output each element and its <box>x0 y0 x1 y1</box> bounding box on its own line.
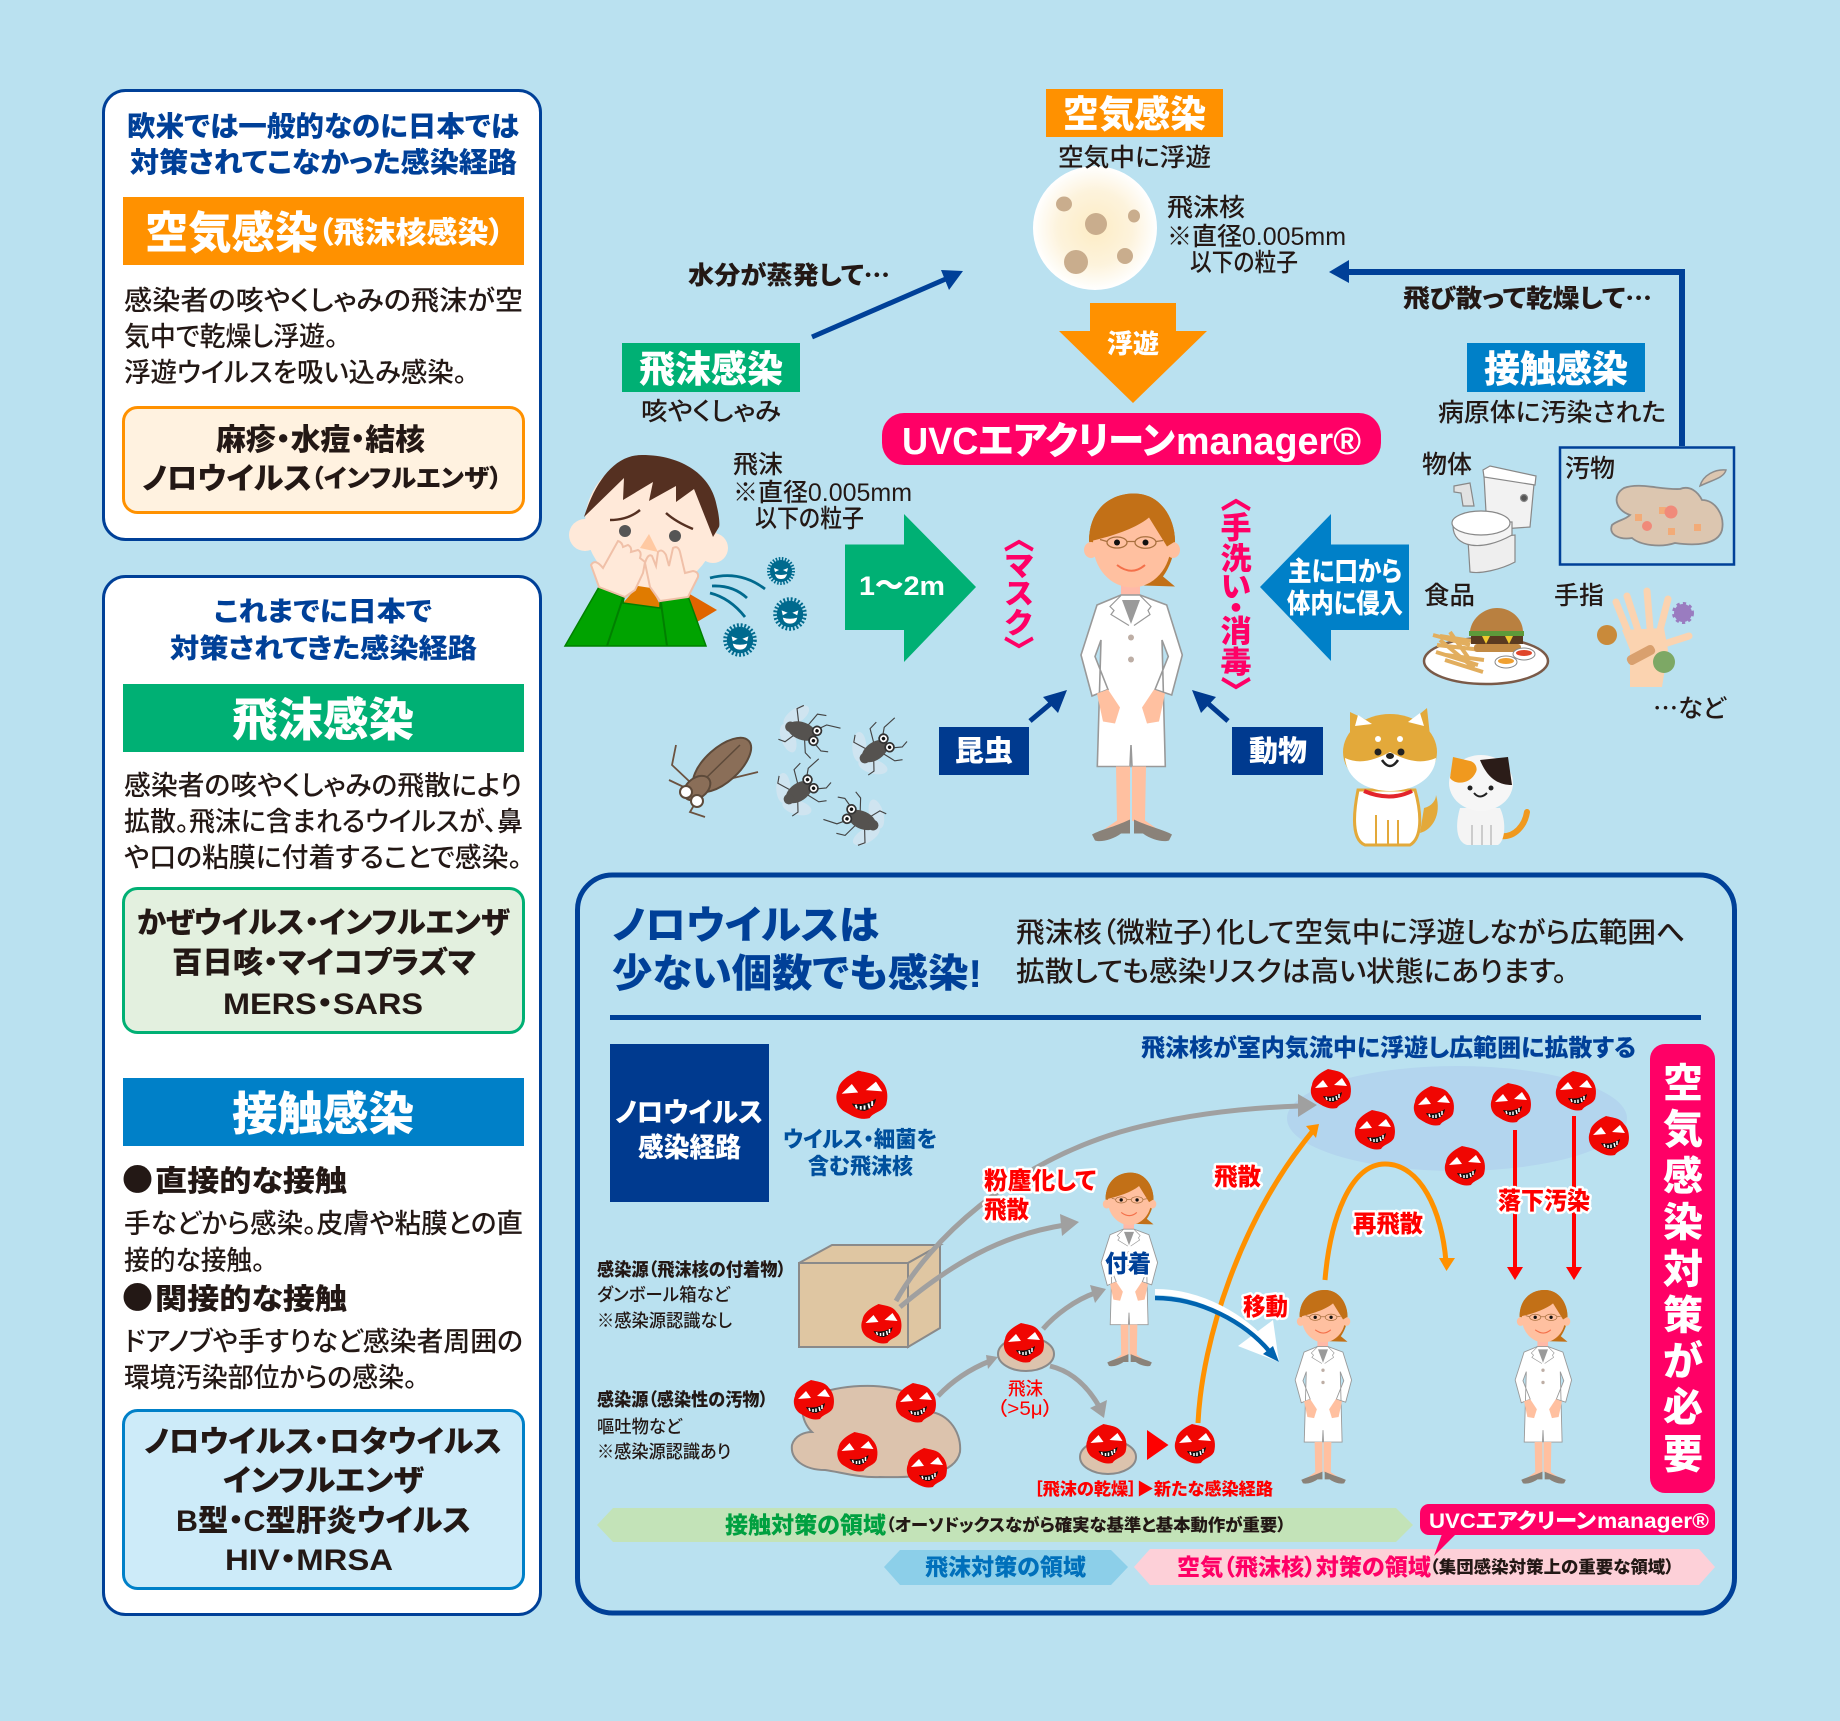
text: source attached: ※感染源認識なし <box>597 1311 732 1331</box>
text: source attached <box>597 1259 786 1331</box>
text: droplet size <box>997 1379 1053 1420</box>
text: contaminated by pathogens: 病原体に汚染された <box>1438 399 1666 427</box>
text: mask: 〈マスク〉 <box>998 537 1034 651</box>
banner: airborne infection: 空気感染 <box>145 209 318 258</box>
callout: UVC air clean manager: manager® <box>1597 1510 1710 1533</box>
box: filth: 汚物 <box>1565 455 1615 483</box>
panel: airborne measures needed: 空気感染対策が必要 <box>1663 1062 1703 1477</box>
illustration: cockroach <box>669 728 760 817</box>
text: airborne description: 気中で乾燥し浮遊。 <box>124 322 338 352</box>
text: droplet description: 感染者の咳やくしゃみの飛散により <box>124 771 522 801</box>
heading: airborne route intro: 欧米では一般的なのに日本では <box>127 111 519 142</box>
heading: conventional routes intro <box>170 597 477 664</box>
nurse: middle <box>1295 1290 1352 1484</box>
illustration: flies <box>762 695 920 857</box>
text: indirect contact <box>122 1273 523 1393</box>
icon: toilet <box>1452 466 1536 573</box>
arrow: move <box>1155 1292 1279 1362</box>
text: object: 物体 <box>1422 451 1472 479</box>
heading: norovirus low dose <box>612 905 982 996</box>
heading: conventional routes intro: 対策されてきた感染経路 <box>170 633 477 664</box>
banner: droplet infection: 飛沫感染 <box>232 694 414 746</box>
heading: airborne route intro: 対策されてこなかった感染経路 <box>130 146 517 178</box>
text: droplet size note <box>733 451 912 533</box>
band: airborne measures <box>1134 1549 1715 1585</box>
text: airborne description: 感染者の咳やくしゃみの飛沫が空 <box>124 286 523 316</box>
text: direct contact <box>122 1155 523 1276</box>
disease box: droplet: MERS・SARS <box>223 988 423 1021</box>
text: source attached: ダンボール箱など <box>597 1285 731 1305</box>
arrow: 1 to 2 metres: 1〜2m <box>859 571 945 601</box>
banner: droplet infection <box>123 684 524 752</box>
illustration: shiba dog <box>1343 708 1438 845</box>
text: direct contact: ● <box>122 1155 153 1200</box>
text: cough and sneeze: 咳やくしゃみ <box>641 398 781 426</box>
disease box: airborne: ノロウイルス <box>142 463 312 496</box>
text: indirect contact: ● <box>122 1273 153 1318</box>
text: airborne description: 浮遊ウイルスを吸い込み感染。 <box>124 358 467 388</box>
band: airborne measures: 空気（飛沫核）対策の領域 <box>1177 1554 1431 1580</box>
band: airborne measures: （集団感染対策上の重要な領域） <box>1430 1557 1674 1577</box>
text: food: 食品 <box>1424 582 1475 610</box>
text: source filth: 嘔吐物など <box>597 1417 683 1437</box>
text: direct contact: 手などから感染。皮膚や粘膜との直 <box>124 1209 523 1239</box>
text: indirect contact: ドアノブや手すりなど感染者周囲の <box>124 1327 523 1357</box>
disease box: contact: HIV・MRSA <box>225 1544 393 1577</box>
disease box: droplet: かぜウイルス・インフルエンザ <box>137 907 510 940</box>
text: attached: 付着 <box>1105 1251 1151 1278</box>
banner: contact infection <box>123 1078 524 1146</box>
arrows: orange respread <box>1198 1124 1455 1423</box>
legend: virus droplet nucleus: ウイルス・細菌を <box>783 1127 937 1152</box>
disease box: airborne: 麻疹・水痘・結核 <box>216 424 425 457</box>
disease box: contact: B型・C型肝炎ウイルス <box>176 1505 471 1538</box>
icon: aerosol oval <box>1287 1066 1627 1171</box>
label: contact infection: 接触感染 <box>1484 349 1628 390</box>
disease box: contact <box>124 1410 524 1588</box>
disease box: droplet: 百日咳・マイコプラズマ <box>172 946 476 980</box>
nurse: contact <box>1101 1173 1158 1366</box>
text: hand washing and disinfection: 〈手洗い・消毒〉 <box>1216 496 1251 692</box>
text: evaporating water: 水分が蒸発して … <box>688 256 890 292</box>
text: source attached: 感染源（飛沫核の付着物） <box>597 1259 786 1280</box>
arrow: into the body: 体内に侵入 <box>1287 589 1403 619</box>
arrows: grey spread paths <box>896 1094 1317 1418</box>
text: norovirus description <box>1016 917 1685 987</box>
band: droplet measures <box>884 1550 1128 1585</box>
disease box: contact: ノロウイルス・ロタウイルス <box>144 1426 502 1459</box>
text: spread: 飛散 <box>1214 1164 1261 1191</box>
heading: spread in room air: 飛沫核が室内気流中に浮遊し広範囲に拡散する <box>1141 1034 1636 1062</box>
banner: UVC air clean manager: UVCエアクリーン <box>902 421 1176 463</box>
text: source filth <box>597 1389 768 1462</box>
label: insects: 昆虫 <box>955 735 1013 768</box>
text: norovirus description: 拡散しても感染リスクは高い状態にあります。 <box>1016 956 1567 987</box>
arrow: animals to nurse <box>1192 690 1228 721</box>
heading: conventional routes intro: これまでに日本で <box>214 597 432 627</box>
banner: UVC air clean manager <box>882 413 1381 465</box>
illustration: cardboard box <box>799 1245 940 1347</box>
band: contact measures <box>597 1508 1413 1542</box>
text: source filth: ※感染源認識あり <box>597 1442 731 1462</box>
illustration: nurse <box>1081 494 1182 841</box>
text: re-scatter: 再飛散 <box>1353 1211 1423 1238</box>
text: norovirus description: 飛沫核（微粒子）化して空気中に浮遊しながら広範囲へ <box>1016 917 1685 948</box>
text: droplet size note: 以下の粒子 <box>755 505 864 533</box>
arrow: floating down: 浮遊 <box>1107 329 1159 359</box>
arrows: falling contamination <box>1507 1116 1582 1280</box>
label: insects <box>939 727 1029 775</box>
label: animals: 動物 <box>1249 735 1307 768</box>
illustration: contaminated objects <box>1422 448 1734 725</box>
text: floating in air: 空気中に浮遊 <box>1058 144 1211 172</box>
text: indirect contact: 関接的な接触 <box>155 1283 347 1316</box>
text: dust scatter <box>984 1168 1096 1224</box>
box: norovirus route title: ノロウイルス <box>615 1098 763 1128</box>
text: etc: …など <box>1653 689 1728 725</box>
label: airborne infection: 空気感染 <box>1063 94 1206 135</box>
text: droplet nucleus note <box>1167 194 1346 277</box>
text: fingers: 手指 <box>1554 582 1604 610</box>
nurse: right <box>1515 1290 1572 1484</box>
panel: droplet and contact infection summary <box>104 576 540 1614</box>
plates: droplets <box>998 1337 1136 1474</box>
label: droplet infection <box>622 343 800 392</box>
text: dust scatter: 粉塵化して <box>984 1168 1096 1195</box>
text: droplet description <box>124 771 523 873</box>
disease box: contact: インフルエンザ <box>223 1465 424 1498</box>
text: droplet size note: 飛沫 <box>733 451 783 479</box>
disease box: airborne <box>124 408 524 512</box>
arrow: 1 to 2 metres <box>845 514 976 662</box>
arrow: red triangle <box>1147 1430 1168 1460</box>
callout: UVC air clean manager: UVCエアクリーン <box>1429 1510 1596 1533</box>
panel: norovirus routes <box>578 875 1734 1613</box>
disease box: airborne: （インフルエンザ） <box>311 465 502 493</box>
icon: droplet nucleus <box>1033 166 1157 290</box>
panel: airborne infection summary <box>104 90 540 540</box>
banner: airborne infection <box>123 197 524 265</box>
illustration: coughing boy <box>565 455 804 654</box>
arrow: contact to nucleus <box>1329 260 1682 446</box>
box: filth <box>1560 448 1734 564</box>
text: dust scatter: 飛散 <box>984 1197 1029 1224</box>
illustration: vomit <box>792 1386 960 1477</box>
arrow: floating down <box>1059 303 1207 403</box>
viruses <box>794 1069 1629 1488</box>
band: droplet measures: 飛沫対策の領域 <box>925 1554 1086 1580</box>
heading: norovirus low dose: ノロウイルスは <box>612 905 880 948</box>
text: droplet nucleus note: 以下の粒子 <box>1190 249 1298 277</box>
illustration: calico cat <box>1449 755 1527 845</box>
banner: UVC air clean manager: manager® <box>1176 421 1361 463</box>
text: droplet description: 拡散。飛沫に含まれるウイルスが、鼻 <box>124 807 523 837</box>
arrow: into the body: 主に口から <box>1288 557 1402 587</box>
text: droplet size note: ※直径0.005mm <box>733 479 912 507</box>
heading: airborne route intro <box>127 111 519 178</box>
band: contact measures: （オーソドックスながら確実な基準と基本動作が重要） <box>886 1515 1286 1535</box>
text: move: 移動 <box>1243 1294 1288 1321</box>
label: droplet infection: 飛沫感染 <box>639 349 783 390</box>
label: animals <box>1232 727 1323 775</box>
band: contact measures: 接触対策の領域 <box>725 1512 886 1538</box>
arrow: insects to nurse <box>1030 690 1067 721</box>
banner: contact infection: 接触感染 <box>232 1088 414 1140</box>
text: airborne description <box>124 286 523 388</box>
diagram: infection routes <box>565 89 1734 857</box>
label: contact infection <box>1467 343 1645 392</box>
box: norovirus route title: 感染経路 <box>638 1132 741 1163</box>
icon: burger plate <box>1424 608 1548 684</box>
legend: virus droplet nucleus: 含む飛沫核 <box>808 1154 913 1179</box>
text: droplet size: 飛沫 <box>1008 1379 1043 1399</box>
text: droplet nucleus note: ※直径0.005mm <box>1167 223 1346 251</box>
arrow: droplet to nucleus <box>812 270 963 337</box>
text: indirect contact: 環境汚染部位からの感染。 <box>124 1363 417 1393</box>
legend: virus droplet nucleus <box>783 1071 937 1179</box>
heading: norovirus low dose: 少ない個数でも感染! <box>612 953 982 996</box>
text: falling contamination: 落下汚染 <box>1498 1188 1590 1215</box>
text: droplet size: （>5μ） <box>997 1398 1053 1420</box>
text: drying new route: ［飛沫の乾燥］▶新たな感染経路 <box>1034 1479 1273 1499</box>
icon: dirty hand <box>1597 591 1692 687</box>
callout: UVC air clean manager <box>1420 1504 1715 1556</box>
banner: airborne infection: （飛沫核感染） <box>318 216 504 250</box>
panel: airborne measures needed <box>1650 1044 1715 1493</box>
disease box: droplet <box>124 888 524 1032</box>
text: droplet nucleus note: 飛沫核 <box>1167 194 1245 222</box>
text: scattered and dried: 飛び散って乾燥して … <box>1403 279 1652 315</box>
arrow: into the body <box>1260 514 1409 661</box>
text: source filth: 感染源（感染性の汚物） <box>597 1389 768 1410</box>
text: direct contact: 接的な接触。 <box>124 1246 265 1276</box>
text: direct contact: 直接的な接触 <box>155 1165 347 1198</box>
box: norovirus route title <box>610 1044 769 1202</box>
text: droplet description: や口の粘膜に付着することで感染。 <box>124 843 522 873</box>
